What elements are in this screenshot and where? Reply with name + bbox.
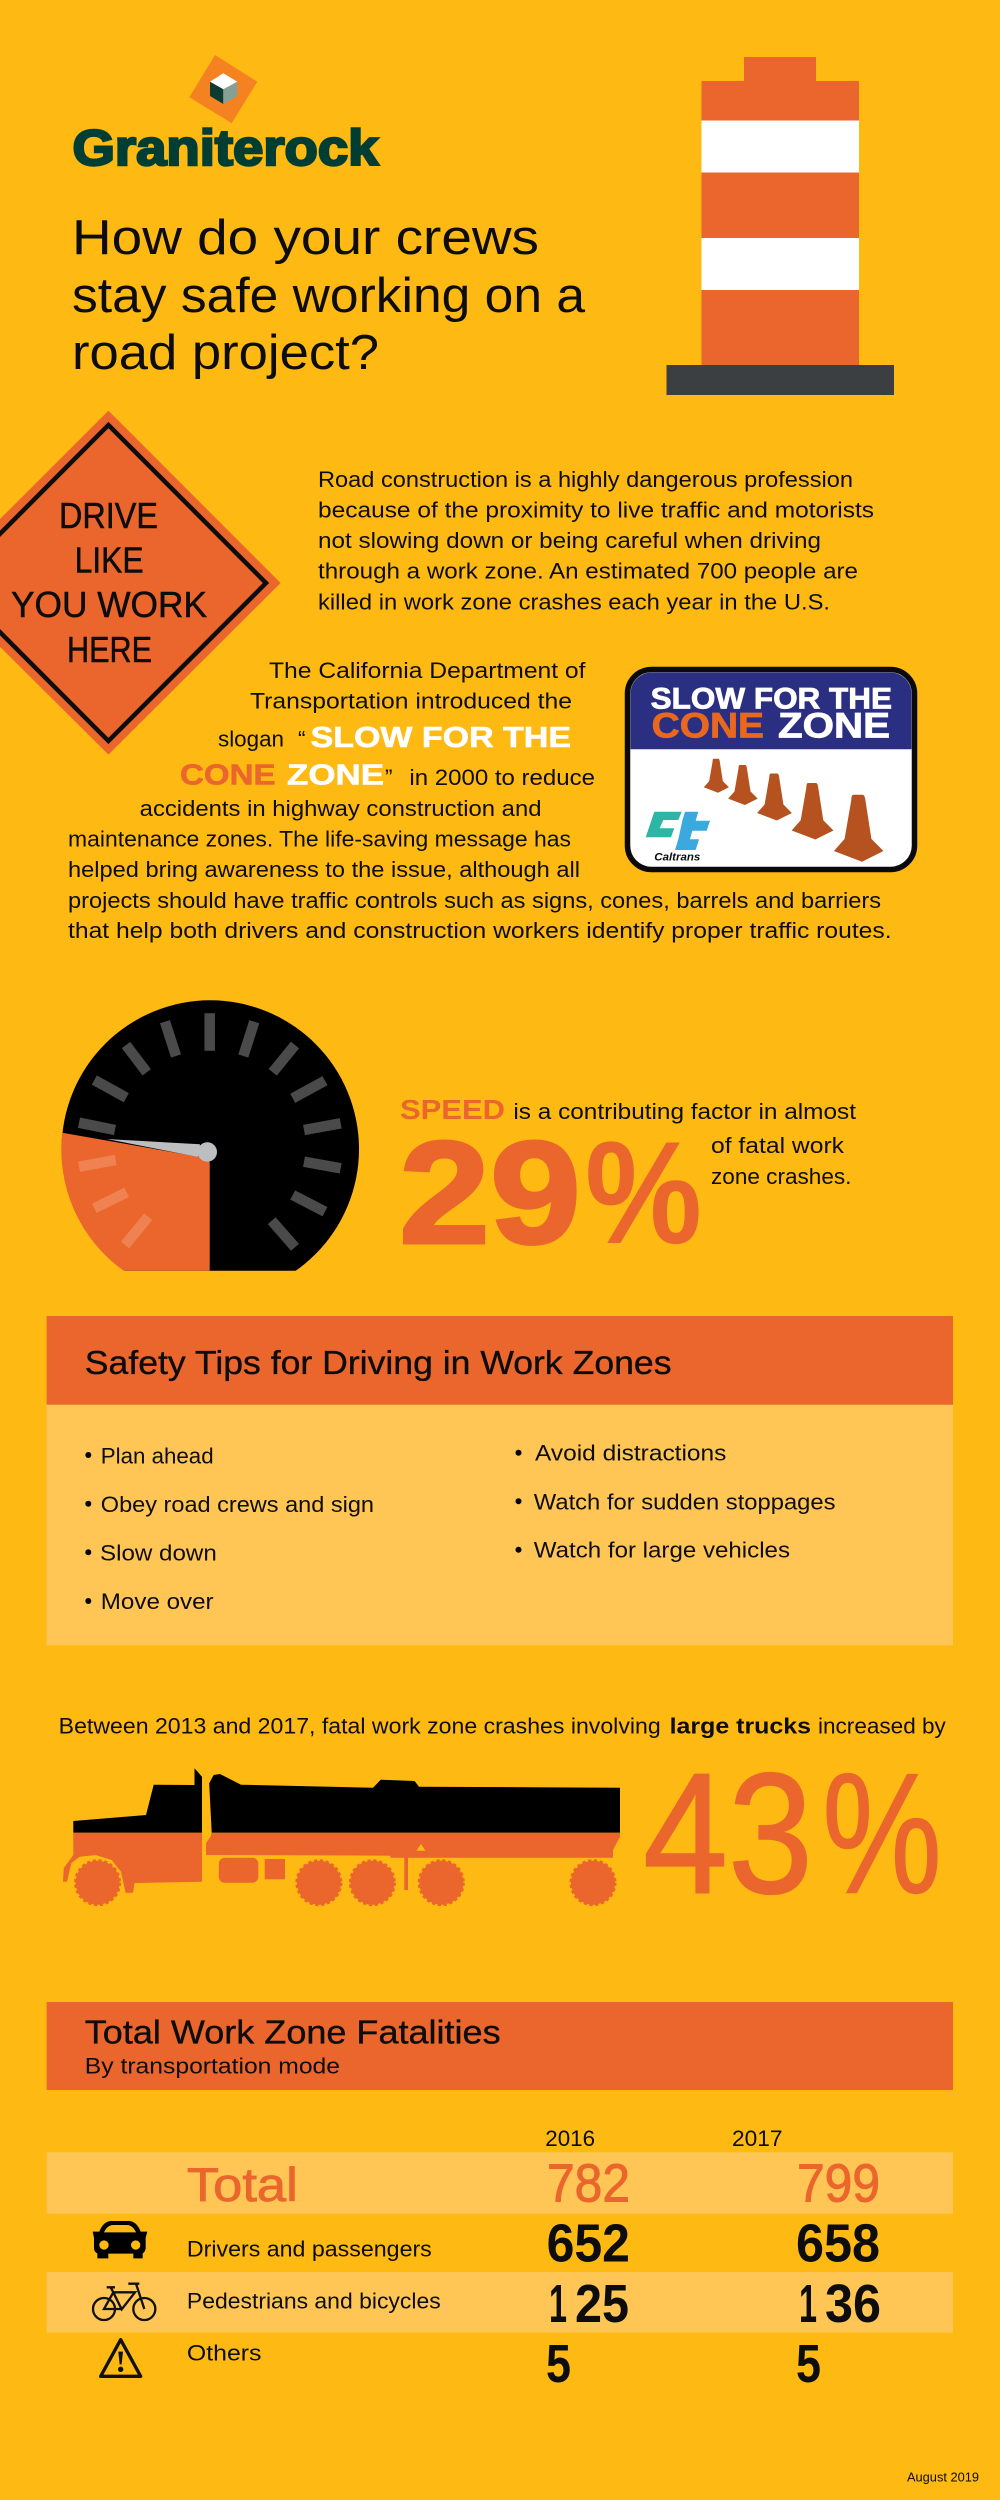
text block: Caltrans slogan paragraph: projects should have traffic controls such as signs, cones, barrels and barriers: [68, 888, 881, 913]
speedometer: [61, 1000, 359, 1298]
table: fatalities by transportation mode: [47, 2126, 953, 2394]
tips list: right column: Avoid distractions: [535, 1441, 726, 1466]
text block: Caltrans slogan paragraph: Transportation introduced the: [250, 689, 572, 714]
big number: 43 percent: 43: [643, 1738, 813, 1930]
callout: speed statistic: zone crashes.: [711, 1164, 851, 1189]
tips list: left column: Plan ahead: [101, 1443, 214, 1468]
row: total: [187, 2154, 880, 2214]
text block: Caltrans slogan paragraph: SLOW FOR THE: [311, 722, 571, 754]
panel: total fatalities heading: [47, 2002, 953, 2090]
tips list: left column: Slow down: [100, 1540, 217, 1565]
text block: Caltrans slogan paragraph: ZONE: [287, 760, 384, 792]
text block: Caltrans slogan paragraph: helped bring awareness to the issue, although all: [68, 857, 580, 882]
text block: intro paragraph: through a work zone. An estimated 700 people are: [318, 559, 858, 584]
icon: Caltrans logo: Caltrans: [654, 852, 700, 864]
big number: 43 percent: [643, 1738, 942, 1930]
sign text: LIKE: [75, 540, 144, 580]
row: pedestrians and bicycles: [187, 2274, 881, 2334]
icon: warning triangle: [101, 2340, 141, 2376]
callout: speed statistic: %: [585, 1111, 702, 1274]
text block: Caltrans slogan paragraph: CONE: [180, 760, 276, 792]
logo: Graniterock: [72, 55, 379, 176]
sign text: YOU WORK: [11, 584, 207, 625]
row: others: Others: [187, 2340, 262, 2365]
column headings: years: 2016: [545, 2126, 595, 2151]
column headings: years: 2017: [732, 2126, 782, 2151]
row: total: 782: [547, 2154, 630, 2214]
sign slogan: SLOW FOR THE: [651, 682, 892, 715]
tips list: right column: [516, 1441, 836, 1563]
tips list: right column: Watch for sudden stoppages: [534, 1489, 836, 1514]
text block: intro paragraph: not slowing down or being careful when driving: [318, 528, 821, 553]
text block: Caltrans slogan paragraph: that help both drivers and construction workers identify proper traffic routes.: [68, 918, 892, 943]
callout: speed statistic: of fatal work: [711, 1133, 845, 1158]
row: pedestrians and bicycles: Pedestrians and bicycles: [187, 2288, 441, 2313]
text block: intro paragraph: because of the proximity to live traffic and motorists: [318, 498, 874, 522]
text block: large trucks statistic: large trucks: [670, 1713, 811, 1738]
text block: intro paragraph: [318, 467, 874, 614]
panel: safety tips: [47, 1316, 953, 1645]
sign text: HERE: [67, 629, 152, 670]
gauge needle: [107, 1139, 217, 1162]
callout: speed statistic: [399, 1094, 857, 1274]
text block: intro paragraph: Road construction is a highly dangerous profession: [318, 467, 853, 492]
text block: Caltrans slogan paragraph: slogan: [218, 726, 284, 752]
row: drivers and passengers: Drivers and passengers: [187, 2237, 432, 2262]
text block: Caltrans slogan paragraph: accidents in highway construction and: [140, 796, 541, 821]
panel: total fatalities heading: Total Work Zone Fatalities: [85, 2013, 501, 2050]
row: drivers and passengers: 652: [547, 2214, 630, 2274]
panel: total fatalities heading: By transportation mode: [85, 2053, 340, 2078]
text block: Caltrans slogan paragraph: ”: [385, 765, 392, 790]
row: pedestrians and bicycles: 1: [549, 2274, 567, 2334]
row: pedestrians and bicycles: 1: [799, 2274, 817, 2334]
text block: large trucks statistic: increased by: [818, 1713, 947, 1738]
title: How do your crews: [72, 211, 539, 265]
row: pedestrians and bicycles: 25: [575, 2274, 629, 2334]
callout: speed statistic: SPEED: [400, 1094, 505, 1125]
callout: speed statistic: 29: [399, 1111, 581, 1274]
text block: large trucks statistic: Between 2013 and 2017, fatal work zone crashes involving: [59, 1713, 661, 1738]
footer date: August 2019: [907, 2470, 979, 2485]
row: drivers and passengers: [187, 2214, 880, 2274]
sign slogan: ZONE: [778, 706, 890, 745]
row: others: 5: [546, 2334, 571, 2394]
row: pedestrians and bicycles: 36: [825, 2274, 881, 2334]
sign text: [11, 495, 207, 670]
tips list: right column: Watch for large vehicles: [534, 1538, 790, 1563]
text block: Caltrans slogan paragraph: “: [298, 726, 306, 752]
text block: Caltrans slogan paragraph: in 2000 to reduce: [409, 765, 595, 790]
gauge tick marks: [79, 1013, 341, 1247]
icon: logo diamond with cube: [189, 55, 257, 123]
title: road project?: [72, 326, 379, 380]
sign slogan: CONE: [652, 706, 764, 745]
row: total: 799: [797, 2154, 880, 2214]
column headings: years: [545, 2126, 782, 2151]
tips list: left column: Move over: [101, 1589, 214, 1614]
heading: safety tips: Safety Tips for Driving in Work Zones: [85, 1344, 672, 1381]
text block: intro paragraph: killed in work zone crashes each year in the U.S.: [318, 589, 830, 614]
text block: Caltrans slogan paragraph: maintenance zones. The life-saving message has: [68, 826, 571, 851]
sign text: DRIVE: [59, 495, 158, 536]
row: others: [187, 2334, 821, 2394]
tips list: left column: [85, 1443, 374, 1614]
text block: Caltrans slogan paragraph: [68, 658, 892, 943]
icon: Caltrans logo: [646, 812, 710, 864]
big number: 43 percent: %: [822, 1738, 942, 1930]
title: [72, 211, 586, 380]
row: others: 5: [796, 2334, 821, 2394]
icon: bicycle: [93, 2284, 155, 2320]
tips list: left column: Obey road crews and sign: [101, 1492, 374, 1517]
callout: speed statistic: is a contributing factor in almost: [513, 1099, 857, 1124]
icon: traffic barrel: [666, 57, 894, 395]
text block: large trucks statistic: [59, 1713, 947, 1738]
icon: car: [93, 2221, 147, 2258]
road sign: drive like you work here: [0, 411, 281, 755]
text block: Caltrans slogan paragraph: The California Department of: [269, 658, 586, 683]
row: drivers and passengers: 658: [796, 2214, 880, 2274]
icon: truck silhouette: [63, 1768, 620, 1905]
road sign: slow for the cone zone: [628, 670, 914, 870]
title: stay safe working on a: [72, 269, 586, 323]
row: total: Total: [187, 2158, 298, 2211]
logo wordmark: Graniterock: [72, 120, 379, 176]
sign slogan: [651, 682, 892, 745]
icon: five traffic cones: [704, 759, 883, 862]
